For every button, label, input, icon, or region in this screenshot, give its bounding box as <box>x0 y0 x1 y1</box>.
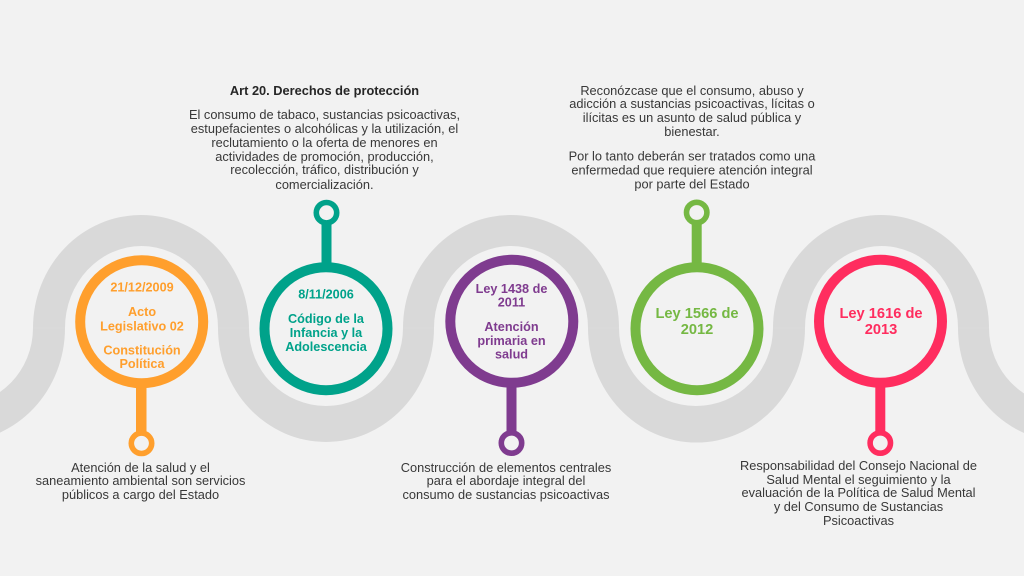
milestone 4 description: Por lo tanto deberán ser tratados como una <box>569 148 816 164</box>
milestone 5: pink circle: Ley 1616 de <box>839 306 923 322</box>
milestone 2 description: actividades de promoción, producción, <box>215 149 434 164</box>
milestone 5 description: y del Consumo de Sustancias <box>774 499 943 514</box>
milestone 4 description: Reconózcase que el consumo, abuso y <box>580 83 804 98</box>
milestone 2 description: Art 20. Derechos de protección <box>230 83 419 98</box>
milestone 5 description <box>740 458 977 528</box>
milestone 2 description: reclutamiento o la oferta de menores en <box>211 135 438 150</box>
milestone 4 description: ilícitas es un asunto de salud pública y <box>583 110 802 125</box>
milestone 1 description: saneamiento ambiental son servicios <box>36 473 245 488</box>
milestone 1 description: públicos a cargo del Estado <box>62 487 219 502</box>
serpentine road band <box>0 215 1024 443</box>
milestone 4 description: adicción a sustancias psicoactivas, lícitas o <box>569 96 815 111</box>
milestone 1 description <box>36 460 245 502</box>
milestone 2: teal circle: Código de la <box>288 312 365 326</box>
milestone 5 description: Salud Mental el seguimiento y la <box>766 472 951 487</box>
milestone 3: purple circle: Ley 1438 de <box>476 282 547 296</box>
milestone 3 description: Construcción de elementos centrales <box>401 460 611 475</box>
milestone 3 description: consumo de sustancias psicoactivas <box>402 487 610 502</box>
milestone 2 description: El consumo de tabaco, sustancias psicoactivas, <box>189 107 460 122</box>
milestone 2 description: comercialización. <box>275 177 374 192</box>
milestone 1: orange circle: Política <box>119 357 165 371</box>
milestone 4: green circle: 2012 <box>681 322 713 338</box>
milestone 2: teal circle: Infancia y la <box>290 326 363 340</box>
milestone 4 description <box>569 83 816 192</box>
milestone 4 description: enfermedad que requiere atención integral <box>571 162 813 178</box>
milestone 3 description <box>401 460 611 502</box>
milestone 2: teal circle: Adolescencia <box>285 340 368 354</box>
milestone 2: teal circle <box>264 202 388 390</box>
milestone 2 description: recolección, tráfico, distribución y <box>230 162 419 177</box>
milestone 4 description: por parte del Estado <box>634 176 750 192</box>
milestone 1: orange circle: 21/12/2009 <box>110 280 174 294</box>
milestone 5 description: Responsabilidad del Consejo Nacional de <box>740 458 977 473</box>
milestone 5: pink circle <box>819 260 942 453</box>
milestone 5: pink circle: 2013 <box>865 322 897 338</box>
milestone 3 description: para el abordaje integral del <box>427 473 585 488</box>
milestone 1: orange circle: Constitución <box>103 344 181 358</box>
milestone 5 description: evaluación de la Política de Salud Mental <box>741 485 976 500</box>
milestone 2 description: estupefacientes o alcohólicas y la utilización, el <box>191 121 458 136</box>
milestone 1 description: Atención de la salud y el <box>71 460 210 475</box>
milestone 4: green circle: Ley 1566 de <box>655 306 739 322</box>
milestone 4 description: bienestar. <box>664 124 720 139</box>
milestone 1: orange circle <box>80 260 203 453</box>
milestone 1: orange circle: Acto <box>128 305 156 319</box>
milestone 4: green circle <box>636 202 758 390</box>
milestone 1: orange circle: Legislativo 02 <box>100 320 184 334</box>
milestone 5 description: Psicoactivas <box>823 513 894 528</box>
milestone 3: purple circle: salud <box>495 348 528 362</box>
milestone 3: purple circle: primaria en <box>477 334 546 348</box>
milestone 3: purple circle <box>450 260 573 453</box>
milestone 3: purple circle: 2011 <box>498 296 525 310</box>
milestone 2 description <box>189 83 460 192</box>
milestone 2: teal circle: 8/11/2006 <box>298 288 354 302</box>
milestone 3: purple circle: Atención <box>484 320 539 334</box>
